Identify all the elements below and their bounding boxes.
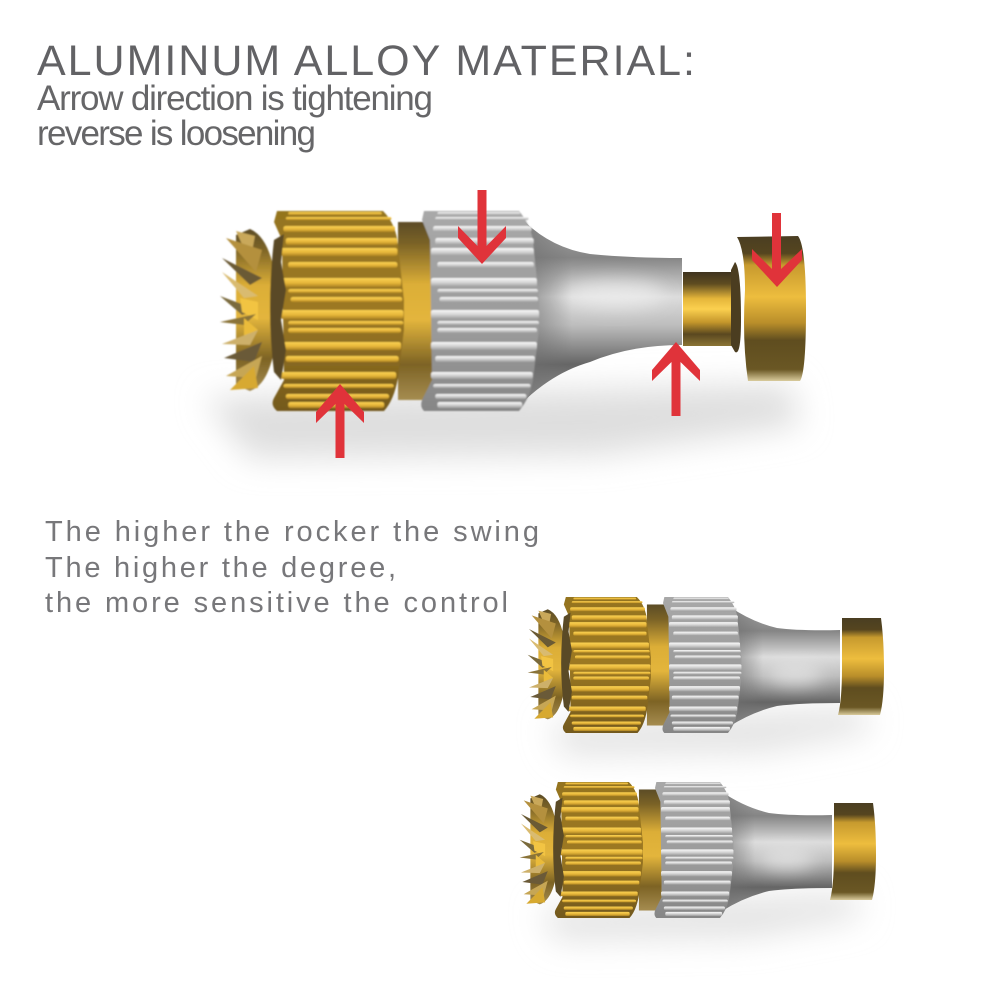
- medium rocker neck: [730, 607, 840, 726]
- subtitle: arrow direction note: [37, 79, 433, 153]
- small rocker: [520, 782, 876, 918]
- red arrow: cap, pointing down: [752, 213, 802, 287]
- description text: The higher the degree,: [45, 552, 396, 584]
- small rocker cap: [830, 803, 876, 900]
- description text: [45, 516, 539, 619]
- large rocker: [220, 211, 806, 411]
- red arrow: gold knurl, pointing up: [316, 384, 364, 458]
- rocker gold cap: [731, 236, 806, 381]
- rocker gold stem: [683, 272, 737, 346]
- medium rocker gear body: [528, 597, 741, 733]
- red arrow: neck, pointing up: [652, 342, 700, 416]
- rocker silver neck: [525, 222, 682, 400]
- medium rocker shadow: [548, 708, 868, 755]
- title: ALUMINUM ALLOY MATERIAL:: [37, 37, 695, 85]
- small rocker shadow: [540, 893, 860, 940]
- medium rocker cap: [838, 618, 884, 715]
- medium rocker: [528, 597, 884, 733]
- large rocker shadow: [205, 385, 800, 458]
- subtitle: arrow direction note: reverse is loosening: [37, 114, 316, 153]
- description text: The higher the rocker the swing: [45, 516, 539, 548]
- small rocker neck: [722, 792, 832, 911]
- description text: the more sensitive the control: [45, 587, 508, 619]
- rocker gear body: [220, 211, 539, 411]
- subtitle: arrow direction note: Arrow direction is tightening: [37, 79, 433, 118]
- red arrow: silver knurl, pointing down: [458, 190, 506, 264]
- small rocker gear body: [520, 782, 733, 918]
